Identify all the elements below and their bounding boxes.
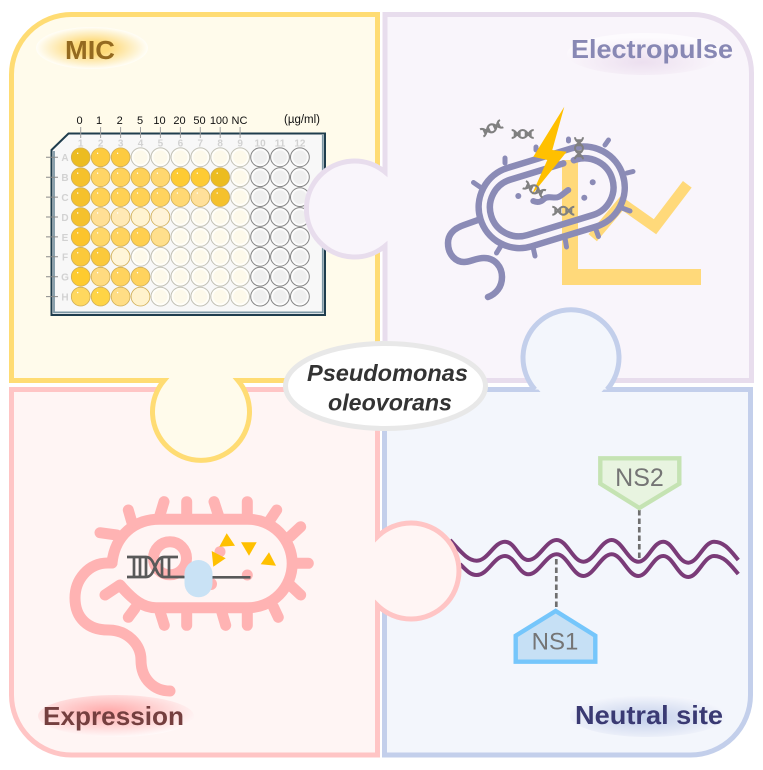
heading: MIC: MIC xyxy=(65,35,115,65)
column numbers: 2 xyxy=(98,138,104,150)
column numbers: 12 xyxy=(294,138,306,150)
tag: NS2 xyxy=(600,458,679,508)
center label: Pseudomonas oleovorans xyxy=(286,344,486,428)
DNA double wave xyxy=(450,540,738,577)
row letters: E xyxy=(62,233,69,244)
spikes xyxy=(474,139,633,256)
column numbers: 3 xyxy=(118,138,124,150)
concentration labels: 10 xyxy=(153,115,166,127)
row letters: D xyxy=(61,213,69,224)
concentration labels: NC xyxy=(232,115,247,127)
panel: MIC xyxy=(12,14,378,460)
concentration labels: 100 xyxy=(210,115,228,127)
concentration labels: 1 xyxy=(96,115,102,127)
column ticks xyxy=(81,127,240,138)
center label: Pseudomonas oleovorans: Pseudomonas xyxy=(307,360,468,386)
DNA template xyxy=(127,557,250,577)
icon: lightning bolt xyxy=(532,107,567,195)
wells grid xyxy=(71,148,309,306)
96-well plate xyxy=(46,114,325,315)
plasmid squiggle xyxy=(533,190,568,202)
row letters: C xyxy=(61,193,69,204)
concentration labels xyxy=(76,114,320,127)
row letters: G xyxy=(61,272,69,284)
heading: Electropulse xyxy=(567,33,733,75)
tag: NS1: NS1 xyxy=(532,628,578,655)
concentration labels: 0 xyxy=(76,115,83,127)
puzzle piece outline: MIC xyxy=(12,14,378,460)
heading: Neutral site xyxy=(570,695,726,737)
icon: DNA fragments xyxy=(480,120,583,215)
row letters: A xyxy=(61,153,69,164)
flagellum xyxy=(448,220,502,297)
column numbers: 6 xyxy=(178,138,184,150)
pink particles xyxy=(205,546,253,590)
heading: Expression xyxy=(38,695,194,737)
concentration labels: 2 xyxy=(117,115,123,127)
column numbers: 1 xyxy=(78,138,84,150)
row letters: B xyxy=(61,173,69,184)
plate body xyxy=(52,134,325,315)
concentration labels: 20 xyxy=(173,115,186,127)
puzzle knob: Neutral site tab xyxy=(523,310,619,390)
heading: MIC xyxy=(36,27,148,69)
column numbers: 10 xyxy=(255,138,266,150)
center label: Pseudomonas oleovorans: oleovorans xyxy=(328,390,452,416)
column numbers: 9 xyxy=(237,138,243,150)
row letters: F xyxy=(62,252,68,264)
heading: Neutral site: Neutral site xyxy=(575,700,723,730)
dashed connector: NS2 xyxy=(638,510,641,558)
column numbers xyxy=(78,138,306,150)
icon: bacterium expressing protein xyxy=(75,502,308,691)
tag: NS2: NS2 xyxy=(615,464,664,492)
concentration labels: 5 xyxy=(137,115,143,127)
icon: bacterium xyxy=(448,136,635,297)
panel: Expression xyxy=(12,390,459,755)
column numbers: 11 xyxy=(275,138,286,150)
tag: NS1 xyxy=(516,611,595,662)
row letters: H xyxy=(61,292,69,304)
row ticks xyxy=(46,157,58,297)
outer and inner cell walls xyxy=(468,136,635,258)
column numbers: 5 xyxy=(158,138,164,150)
heading: Expression: Expression xyxy=(43,701,184,731)
panel: Neutral site xyxy=(384,310,750,755)
heading: Electropulse: Electropulse xyxy=(571,34,733,64)
puzzle piece outline: Electropulse xyxy=(306,14,752,380)
puzzle piece outline: Neutral site xyxy=(384,310,750,755)
column numbers: 7 xyxy=(198,138,204,150)
column numbers: 4 xyxy=(138,138,144,150)
cytoplasm dots xyxy=(515,179,596,201)
ribosome blob xyxy=(184,560,212,597)
bacterium body, spikes and flagellum xyxy=(75,502,308,691)
row letters xyxy=(61,153,69,304)
protein triangles xyxy=(212,533,276,567)
puzzle piece outline: Expression xyxy=(12,390,459,755)
plate inner edge xyxy=(54,135,323,312)
panel: Electropulse xyxy=(306,14,752,380)
dashed connector: NS1 xyxy=(555,559,558,608)
concentration labels: (µg/ml) xyxy=(284,114,320,126)
column numbers: 8 xyxy=(217,138,223,150)
concentration labels: 50 xyxy=(193,115,206,127)
chart: pulse curve axes xyxy=(570,160,701,277)
